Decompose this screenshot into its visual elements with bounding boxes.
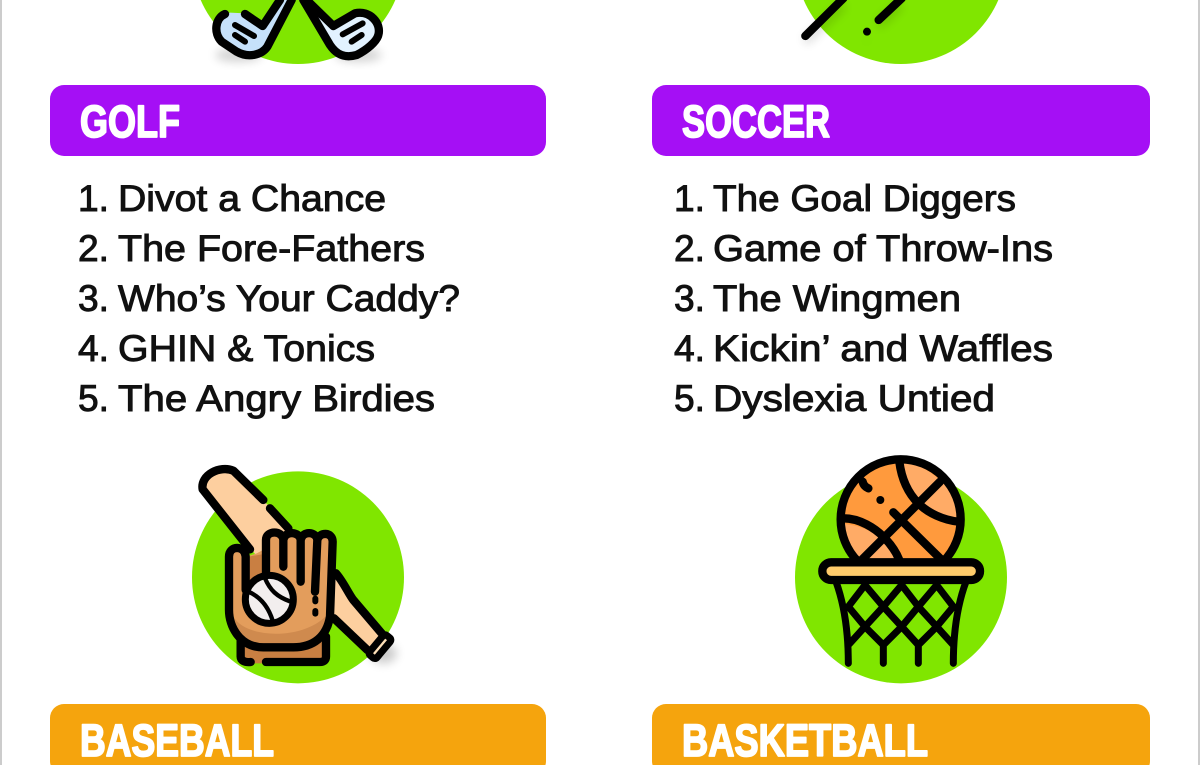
rim — [822, 562, 980, 580]
list: golf team names: Divot a Chance — [118, 178, 386, 219]
ball — [841, 459, 961, 579]
glove body — [229, 532, 333, 647]
heading bar: basketball: BASKETBALL — [682, 715, 928, 765]
panel: basketball — [652, 459, 1150, 765]
panel: soccer — [652, 0, 1150, 419]
list: soccer team names: Kickin’ and Waffles — [713, 328, 1053, 369]
list: soccer team names: 5. — [674, 378, 705, 419]
list: soccer team names: The Wingmen — [713, 278, 961, 319]
list: golf team names: The Angry Birdies — [118, 378, 435, 419]
list: soccer team names: 3. — [674, 278, 705, 319]
icon: basketball and hoop — [795, 459, 1007, 683]
list: golf team names: 2. — [78, 228, 109, 269]
list: golf team names: Who’s Your Caddy? — [118, 278, 460, 319]
list: soccer team names: 4. — [674, 328, 705, 369]
list: soccer team names: 2. — [674, 228, 705, 269]
list: soccer team names — [674, 178, 1053, 419]
list: golf team names: The Fore-Fathers — [118, 228, 425, 269]
list: soccer team names: 1. — [674, 178, 705, 219]
heading bar: soccer — [652, 85, 1150, 156]
list: soccer team names: The Goal Diggers — [713, 178, 1016, 219]
bat — [202, 469, 383, 652]
list: golf team names: 1. — [78, 178, 109, 219]
heading bar: basketball — [652, 704, 1150, 765]
heading bar: baseball — [50, 704, 546, 765]
heading bar: golf — [50, 85, 546, 156]
heading bar: soccer: SOCCER — [682, 96, 830, 147]
heading bar: baseball: BASEBALL — [80, 715, 274, 765]
icon: golf clubs — [192, 0, 404, 64]
list: soccer team names: Game of Throw-Ins — [713, 228, 1053, 269]
list: golf team names: 5. — [78, 378, 109, 419]
icon: soccer motion lines — [795, 0, 1007, 64]
net — [836, 582, 966, 663]
panel: baseball — [50, 469, 546, 765]
list: golf team names: 3. — [78, 278, 109, 319]
list: soccer team names: Dyslexia Untied — [713, 378, 995, 419]
icon: baseball bat and glove — [192, 469, 404, 683]
list: golf team names: 4. — [78, 328, 109, 369]
glove base — [241, 633, 326, 663]
panel: golf — [50, 0, 546, 419]
heading bar: golf: GOLF — [80, 96, 180, 147]
list: golf team names — [78, 178, 460, 419]
list: golf team names: GHIN & Tonics — [118, 328, 375, 369]
baseball — [245, 575, 293, 623]
